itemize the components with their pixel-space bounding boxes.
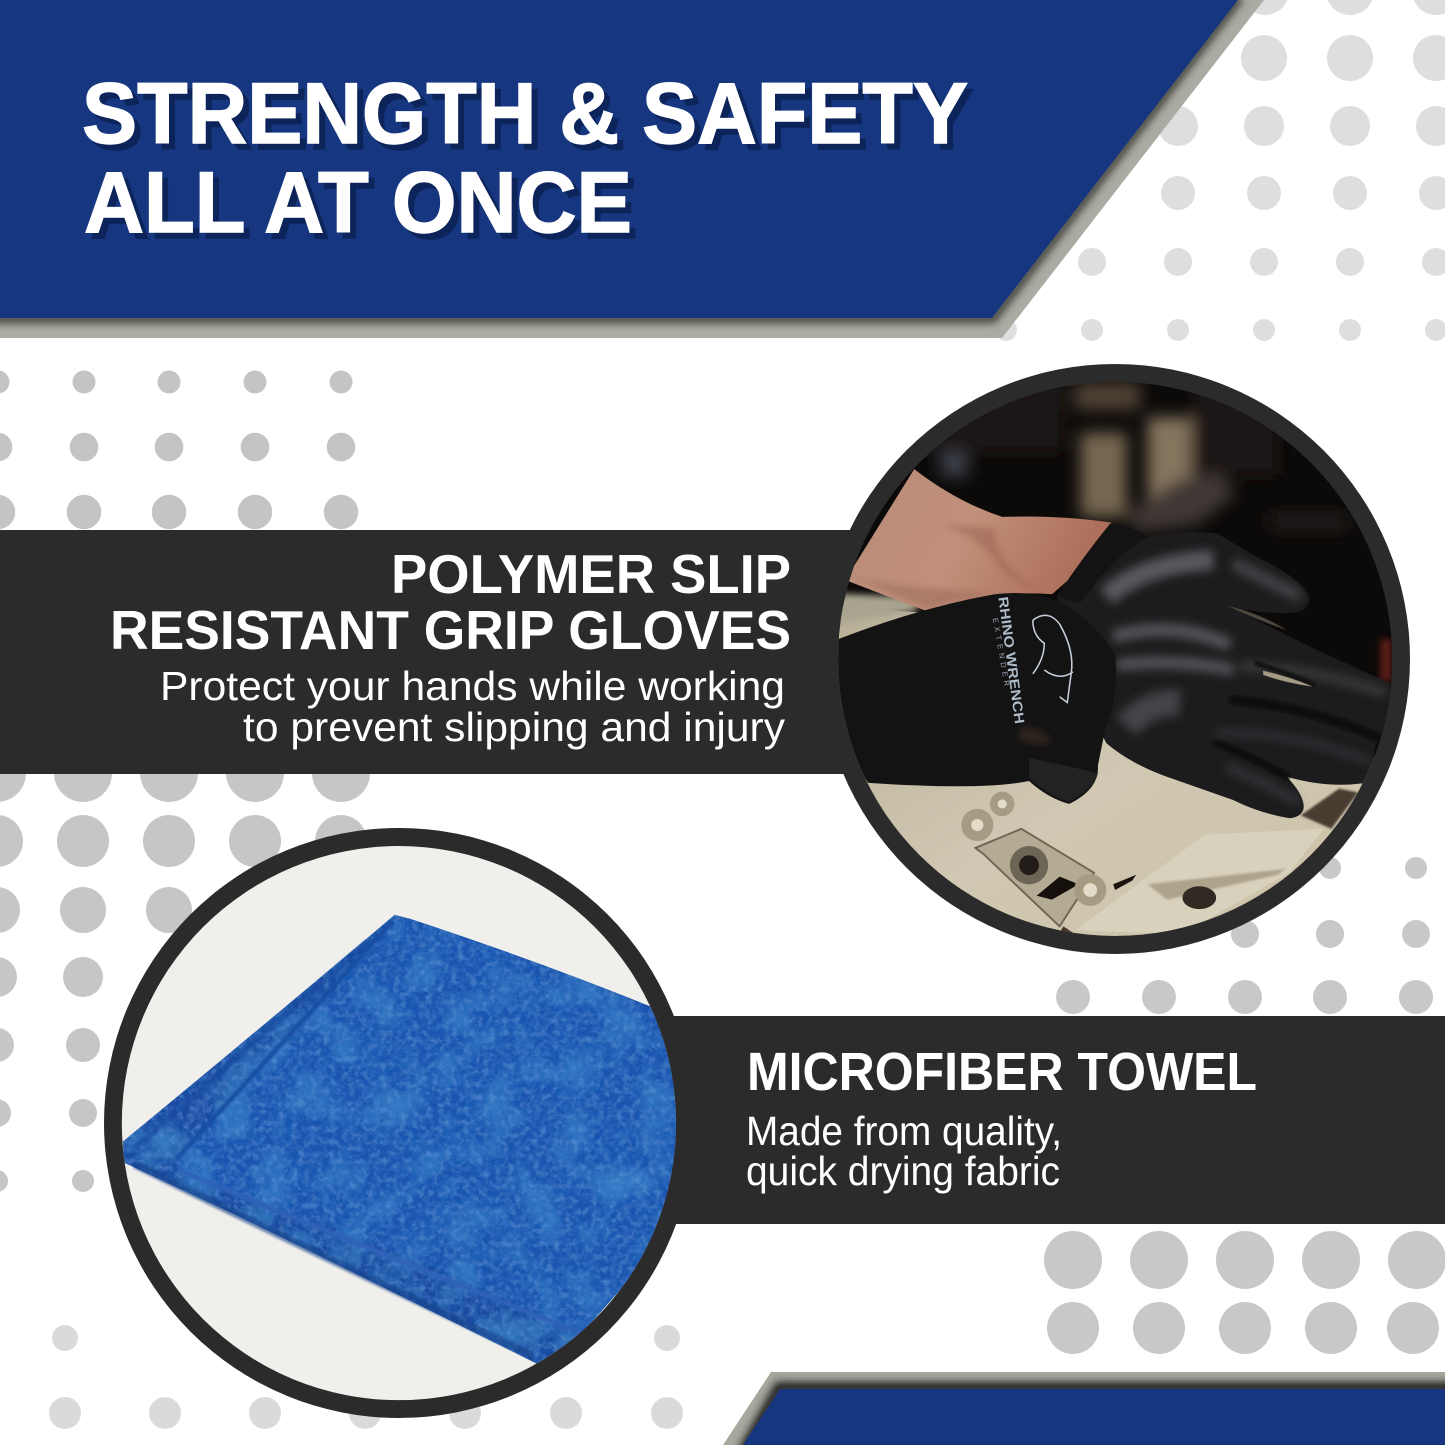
glove logo text: RHINO WRENCH xyxy=(995,596,1027,725)
white surface xyxy=(122,846,676,1400)
gloves heading: POLYMER SLIP xyxy=(391,543,791,605)
halftone dots: right bottom xyxy=(1044,1231,1445,1354)
title: ALL AT ONCE xyxy=(84,155,632,251)
gloves description: Protect your hands while working xyxy=(160,663,785,709)
towel description: Made from quality, xyxy=(746,1108,1062,1154)
title: STRENGTH & SAFETY xyxy=(88,72,974,168)
halftone dots: right middle xyxy=(1056,857,1433,1014)
band: towel xyxy=(650,1016,1445,1224)
cuff xyxy=(1056,524,1148,603)
icon: rhino logo xyxy=(1033,615,1073,703)
gloves heading: RESISTANT GRIP GLOVES xyxy=(110,599,791,661)
bottom right corner banner xyxy=(723,1372,1445,1445)
band: gloves xyxy=(0,530,870,774)
halftone dots: left lower xyxy=(0,744,370,1192)
front glove xyxy=(830,593,1116,804)
hand xyxy=(845,469,1111,611)
towel xyxy=(123,915,697,1365)
photo circle: towel xyxy=(100,820,700,1420)
gloves heading xyxy=(110,543,791,661)
halftone dots: left upper xyxy=(0,370,358,529)
work surface xyxy=(830,593,1396,960)
glove logo text: EXTENDER xyxy=(991,617,1012,687)
finger gaps xyxy=(1216,663,1376,777)
sheen highlights xyxy=(1106,560,1386,803)
gloves description xyxy=(160,663,786,750)
halftone dots: bottom left xyxy=(49,1325,683,1429)
title xyxy=(82,66,974,257)
towel description xyxy=(746,1108,1062,1194)
towel description: quick drying fabric xyxy=(746,1148,1060,1194)
halftone dots: top right xyxy=(995,0,1445,341)
photo circle: gloves xyxy=(820,360,1430,960)
gloves description: to prevent slipping and injury xyxy=(243,704,786,750)
rear glove xyxy=(1056,524,1390,818)
towel heading: MICROFIBER TOWEL xyxy=(747,1042,1257,1102)
title: ALL AT ONCE xyxy=(90,161,638,257)
title: STRENGTH & SAFETY xyxy=(82,66,968,162)
header banner xyxy=(0,0,1264,338)
workshop background xyxy=(838,382,1392,936)
